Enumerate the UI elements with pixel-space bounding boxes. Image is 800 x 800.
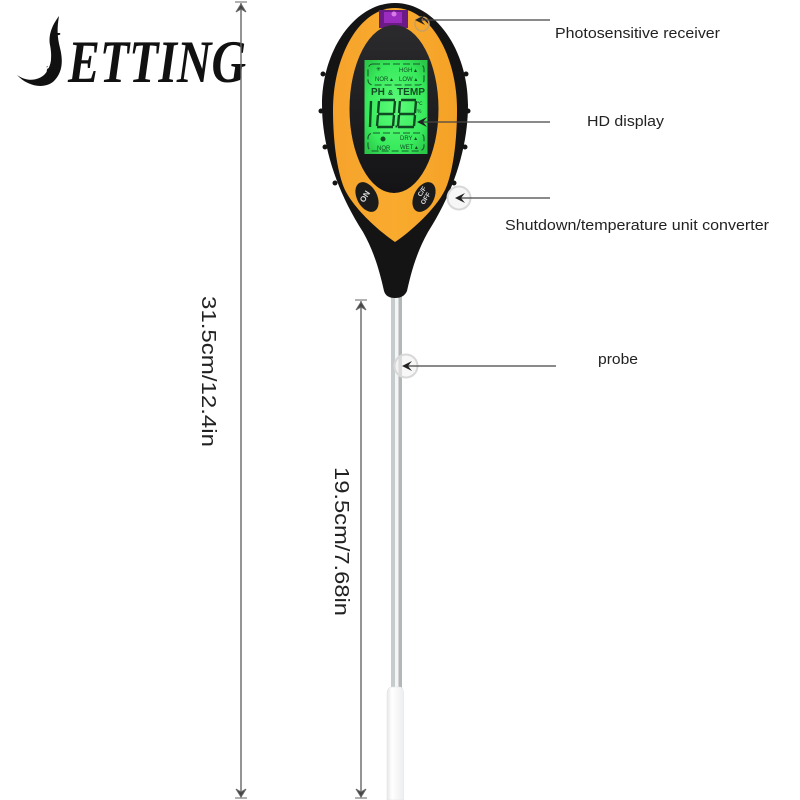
LCD panel: NOR (377, 146, 391, 152)
dimension line: probe length (355, 300, 367, 798)
callout: photosensitive receiver: Photosensitive receiver (555, 25, 720, 42)
black casing (322, 3, 468, 298)
seven-segment reading (370, 100, 416, 127)
orange faceplate (333, 8, 457, 242)
LCD panel (364, 60, 428, 154)
LCD panel: DRY ▴ (400, 136, 417, 142)
grip bumps (318, 72, 470, 186)
label: probe length: 19.5cm/7.68in (330, 467, 352, 616)
ON button (351, 178, 383, 216)
callout: shutdown/temperature unit converter (448, 186, 769, 234)
callout: HD display (417, 113, 665, 130)
OFF button: C/F (417, 185, 428, 198)
meter body (318, 3, 470, 298)
callout: HD display: HD display (587, 113, 665, 130)
LCD panel: WET ▴ (400, 145, 418, 151)
probe rod (391, 296, 402, 692)
callout: photosensitive receiver (415, 15, 720, 42)
LCD panel: ✳ (376, 66, 381, 73)
probe white handle (387, 687, 404, 800)
LCD panel: NOR ▴ (375, 77, 393, 83)
purple photosensitive receiver (379, 10, 408, 28)
callout: probe (394, 351, 638, 378)
logo: Jetting (17, 16, 246, 95)
dimension line: total length (235, 2, 247, 798)
screen bezel (350, 25, 438, 193)
LCD panel: PH (371, 87, 385, 98)
LCD panel: & (388, 90, 393, 97)
LCD panel: % (417, 109, 422, 115)
LCD panel: HGH ▴ (399, 68, 417, 74)
LCD panel: LOW ▴ (399, 77, 417, 83)
logo: Jetting: ETTING (67, 29, 246, 95)
OFF button (408, 178, 440, 216)
LCD panel: ℃ (417, 101, 423, 107)
OFF button: OFF (420, 191, 433, 206)
label: total length: 31.5cm/12.4in (197, 296, 219, 447)
callout: shutdown/temperature unit converter: Shutdown/temperature unit converter (505, 217, 769, 234)
callout: probe: probe (598, 351, 638, 368)
ON button: ON (358, 189, 372, 204)
LCD panel: TEMP (397, 87, 425, 98)
logo: Jetting: J (46, 20, 61, 88)
